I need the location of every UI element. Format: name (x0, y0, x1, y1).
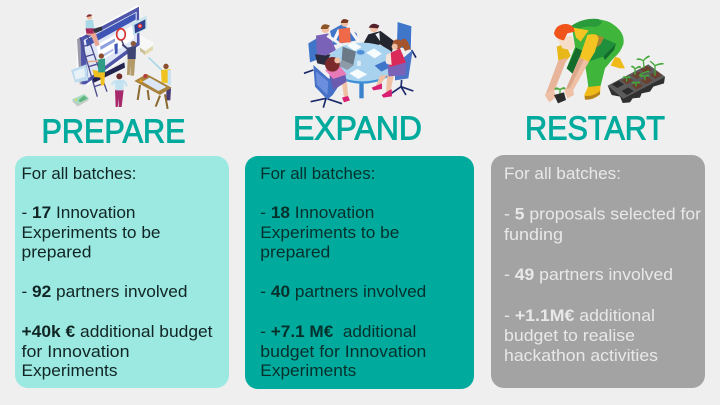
text: intro line: For all batches: (260, 164, 375, 183)
text: budget: hackathon activities (504, 346, 658, 365)
text: experiments: - 18 Innovation (260, 203, 374, 222)
text: experiments: Experiments to be (260, 223, 399, 242)
panel: restart (491, 155, 705, 388)
figure: person sitting on the monitor (86, 14, 102, 46)
icon: right chair (390, 50, 413, 95)
icon: ladder (80, 34, 107, 97)
icon: magnifier (117, 29, 125, 46)
text: experiments (260, 203, 399, 262)
figure: person on the ladder (88, 53, 105, 86)
text: experiments: prepared (22, 242, 92, 262)
text: budget: Experiments (260, 361, 356, 380)
text: budget: budget to realise (504, 326, 635, 345)
text: budget: - +1.1M€ additional (504, 306, 655, 325)
illustration: team meeting around a table (304, 19, 416, 108)
text: intro line: For all batches: (22, 164, 136, 183)
icon: workshop table (134, 74, 172, 109)
icon: papers (347, 42, 382, 79)
text: budget (260, 322, 426, 380)
text: budget: - +7.1 M€ additional (260, 322, 416, 341)
figure: person in black suit (361, 24, 394, 52)
figure: woman at the back (334, 19, 359, 43)
icon: monitor (71, 5, 140, 85)
heading: EXPAND: EXPAND (293, 110, 422, 146)
icon: table (328, 43, 397, 98)
figure: woman on the right (372, 39, 411, 98)
figure: gardener (545, 19, 625, 102)
icon: seedling tray (608, 56, 665, 103)
text: partners: - 49 partners involved (504, 265, 673, 284)
hair (554, 24, 575, 40)
text: proposals (504, 204, 701, 244)
figure: person with phone (112, 73, 127, 107)
illustration: gardener planting seedlings (545, 19, 665, 103)
text: budget: for Innovation (22, 342, 130, 361)
text: proposals: - 5 proposals selected for (504, 204, 701, 224)
face (557, 36, 575, 50)
text: experiments (22, 203, 160, 262)
yellow shirt (573, 28, 589, 42)
text: intro line: For all batches: (504, 164, 621, 183)
panel: prepare (15, 156, 229, 388)
icon: small laptop and glass (357, 50, 391, 72)
text: proposals: funding (504, 225, 563, 244)
text: budget (504, 306, 658, 365)
illustration: team preparing a website (71, 5, 172, 109)
text: partners: - 40 partners involved (260, 282, 426, 301)
icon: back chairs (308, 22, 416, 62)
figure: person at table (148, 57, 171, 100)
text: experiments: Experiments to be (22, 223, 160, 242)
back boot (611, 57, 625, 68)
icon: seedling in hand (554, 88, 566, 103)
text: partners: - 92 partners involved (22, 282, 188, 301)
text: budget: budget for Innovation (260, 342, 426, 361)
icon: video card (132, 16, 147, 36)
text: budget: Experiments (22, 361, 118, 380)
figure: woman with laptop (325, 57, 350, 102)
text: experiments: prepared (260, 242, 330, 262)
panel: expand (245, 156, 474, 389)
icon: laptop (338, 47, 356, 70)
figure: person with magnifier (122, 41, 136, 76)
hands (564, 88, 574, 98)
text: experiments: - 17 Innovation (22, 203, 136, 222)
arms (566, 58, 589, 90)
text: budget (22, 322, 213, 380)
icon: photo card (72, 94, 89, 107)
heading: RESTART: RESTART (525, 110, 665, 146)
heading: PREPARE: PREPARE (42, 112, 186, 150)
front boot (584, 83, 601, 100)
text: budget: +40k € additional budget (22, 322, 213, 341)
icon: paper stack (140, 35, 153, 55)
icon: front left chair (304, 65, 343, 108)
green overalls (567, 19, 624, 87)
figure: man at the back left (315, 24, 341, 65)
